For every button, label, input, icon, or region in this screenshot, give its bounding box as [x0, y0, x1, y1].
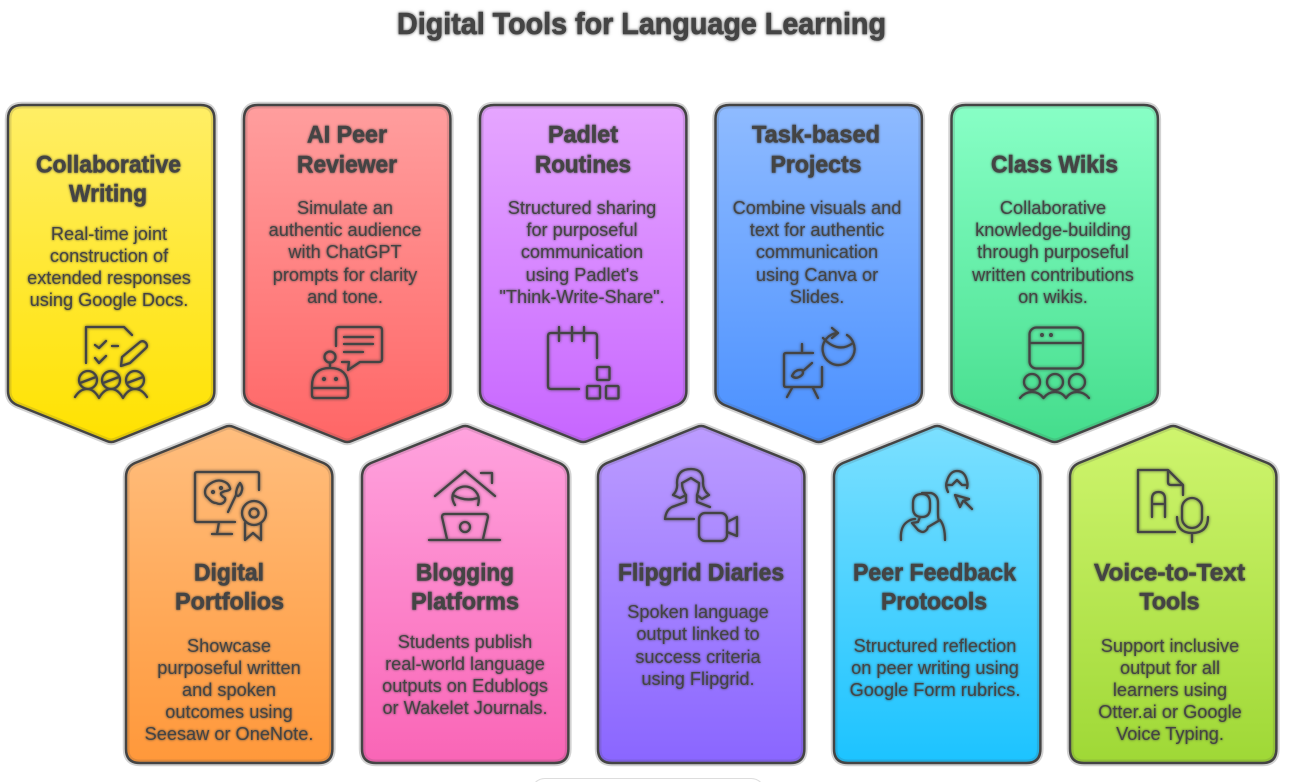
description: or Wakelet Journals.	[382, 698, 548, 718]
description: output for all	[1120, 658, 1220, 678]
heading: Peer Feedback	[853, 560, 1017, 586]
description: text for authentic	[750, 220, 884, 240]
description: communication	[521, 242, 643, 262]
description: outputs on Edublogs	[382, 676, 548, 696]
heading: Tools	[1140, 588, 1200, 616]
description	[627, 602, 769, 689]
panel: Blogging Platforms	[362, 426, 568, 763]
description	[1098, 636, 1242, 744]
panel: Padlet Routines	[480, 105, 686, 442]
description: using Google Docs.	[30, 290, 188, 310]
description: extended responses	[27, 268, 191, 288]
card shape	[126, 426, 332, 763]
icon: robot with speech bubble	[312, 327, 382, 398]
description	[27, 224, 191, 310]
description: authentic audience	[269, 220, 421, 240]
card shape	[8, 105, 214, 442]
panel: Task-based Projects	[716, 105, 922, 442]
partial white footer pill	[531, 778, 765, 782]
card shape	[1070, 426, 1276, 763]
card shape	[598, 426, 804, 763]
panel: Digital Portfolios	[126, 426, 332, 763]
description: communication	[756, 242, 878, 262]
card shape	[716, 105, 922, 442]
icon: browser window and three learners	[1020, 328, 1089, 398]
heading: Writing	[69, 180, 147, 208]
description: on wikis.	[1018, 287, 1088, 307]
panel: Peer Feedback Protocols	[834, 426, 1040, 763]
description: Real-time joint	[51, 224, 167, 244]
heading: Collaborative	[36, 152, 181, 178]
description: Otter.ai or Google	[1098, 702, 1242, 722]
panel: Flipgrid Diaries	[598, 426, 804, 763]
description: through purposeful	[977, 242, 1129, 262]
description: Structured sharing	[508, 198, 656, 218]
heading: Class Wikis	[991, 152, 1118, 178]
heading: Padlet	[548, 122, 618, 148]
heading	[535, 122, 631, 178]
description: Seesaw or OneNote.	[145, 724, 313, 744]
description	[382, 632, 548, 718]
description: output linked to	[636, 624, 760, 644]
description: learners using	[1113, 680, 1227, 700]
card shape	[362, 426, 568, 763]
icon: checklist, pencil and three learners	[75, 327, 147, 398]
description: Voice Typing.	[1116, 724, 1224, 744]
description: Combine visuals and	[733, 198, 901, 218]
description: Students publish	[398, 632, 532, 652]
description: on peer writing using	[851, 658, 1019, 678]
description: Simulate an	[297, 198, 393, 218]
card shape	[834, 426, 1040, 763]
description: Collaborative	[1000, 198, 1106, 218]
description: using Flipgrid.	[641, 669, 755, 689]
heading	[853, 560, 1017, 616]
heading: Digital	[194, 560, 264, 586]
panel: AI Peer Reviewer	[244, 105, 450, 442]
panel: Class Wikis	[952, 105, 1158, 442]
heading: AI Peer	[307, 122, 387, 148]
icon: house, person and laptop	[429, 471, 500, 540]
icon: document with letter A and microphone	[1138, 470, 1208, 542]
description	[971, 198, 1134, 307]
heading: Protocols	[881, 588, 987, 616]
icon: person with video camera	[665, 469, 737, 541]
heading: Blogging	[416, 560, 514, 586]
description: outcomes using	[165, 702, 293, 722]
description: and spoken	[182, 680, 276, 700]
icon: easel with rotating chart	[784, 328, 855, 398]
icon: monitor with palette and medal	[195, 472, 266, 540]
description: and tone.	[307, 287, 383, 307]
description	[733, 198, 901, 307]
icon: calendar with blocks	[548, 327, 618, 398]
description: for purposeful	[526, 220, 638, 240]
description: Structured reflection	[854, 636, 1016, 656]
heading	[36, 152, 181, 208]
heading	[411, 560, 519, 616]
description: knowledge-building	[975, 220, 1131, 240]
heading: Portfolios	[175, 588, 284, 616]
description: Spoken language	[627, 602, 769, 622]
description: using Canva or	[756, 265, 878, 285]
description: prompts for clarity	[273, 265, 418, 285]
card shape	[480, 105, 686, 442]
description	[145, 636, 313, 744]
description: Slides.	[790, 287, 844, 307]
heading: Voice-to-Text	[1094, 560, 1245, 586]
heading: Reviewer	[297, 152, 397, 178]
heading	[297, 122, 397, 178]
heading: Routines	[535, 152, 631, 178]
heading	[752, 122, 880, 178]
description: Showcase	[187, 636, 271, 656]
description: written contributions	[971, 265, 1134, 285]
heading: Flipgrid Diaries	[618, 560, 784, 586]
panel: Collaborative Writing	[8, 105, 214, 442]
description: "Think-Write-Share".	[499, 287, 665, 307]
card shape	[952, 105, 1158, 442]
description: real-world language	[385, 654, 545, 674]
heading: Task-based	[752, 122, 880, 148]
description: Support inclusive	[1101, 636, 1239, 656]
description: success criteria	[635, 647, 762, 667]
description	[850, 636, 1020, 700]
description: purposeful written	[157, 658, 301, 678]
description	[499, 198, 665, 307]
title: Digital Tools for Language Learning	[397, 6, 886, 41]
heading	[175, 560, 284, 616]
description: using Padlet's	[526, 265, 638, 285]
heading: Platforms	[411, 588, 519, 616]
description: Google Form rubrics.	[850, 680, 1020, 700]
description: with ChatGPT	[287, 242, 402, 262]
panel: Voice-to-Text Tools	[1070, 426, 1276, 763]
heading: Projects	[770, 152, 862, 178]
heading	[1094, 560, 1245, 616]
description	[269, 198, 421, 307]
icon: two people and cursor	[901, 471, 972, 540]
card shape	[244, 105, 450, 442]
description: construction of	[50, 246, 169, 266]
